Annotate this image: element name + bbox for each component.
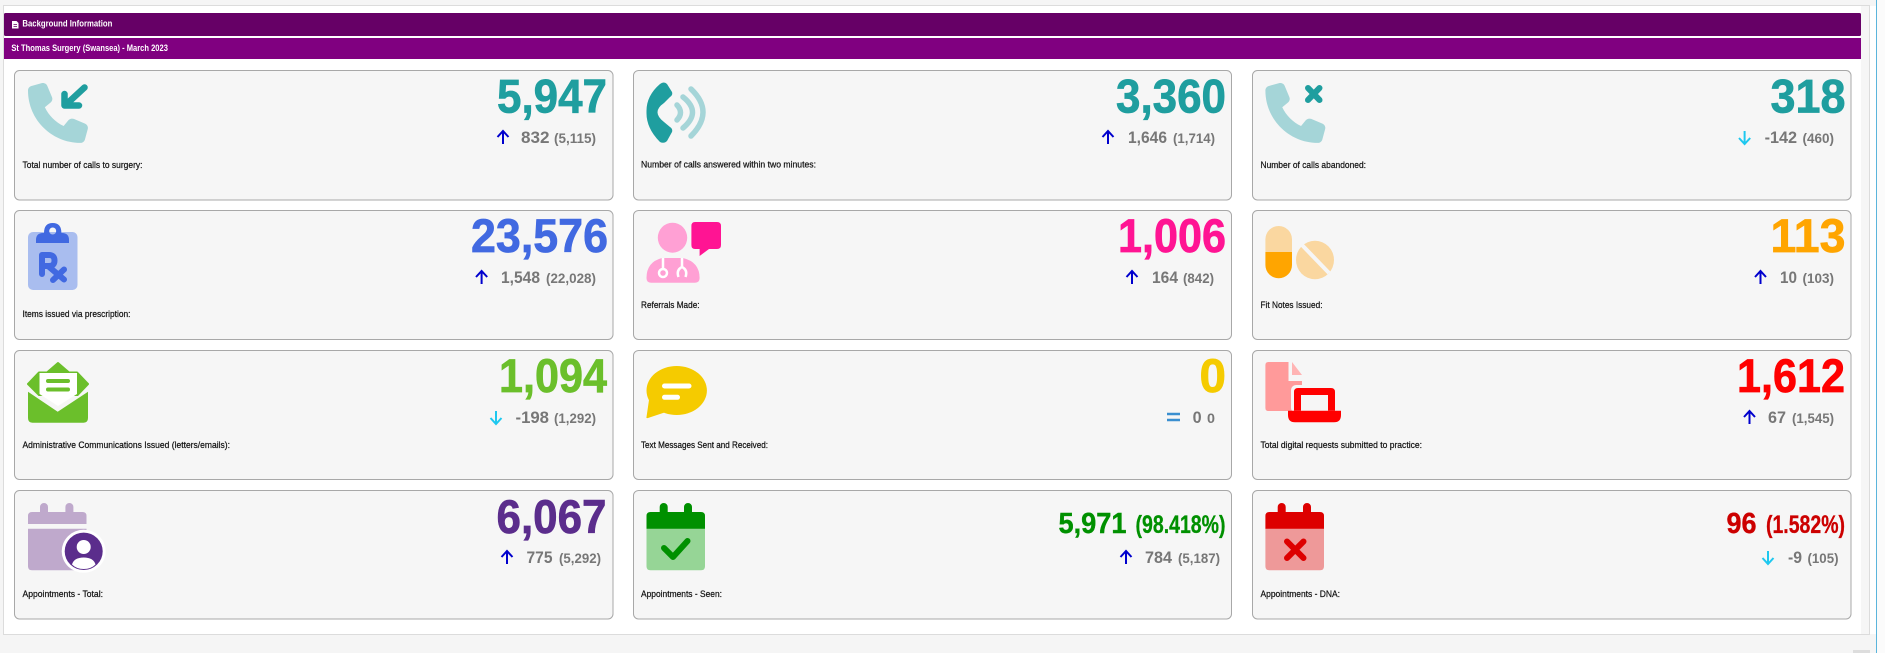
icon: open envelope bbox=[28, 363, 88, 423]
panel: text messages bbox=[634, 349, 1232, 480]
panel: fit notes bbox=[1252, 209, 1851, 340]
change indicator bbox=[498, 128, 596, 147]
label: Appointments - Seen: bbox=[641, 589, 722, 600]
change indicator: (1,292) bbox=[554, 410, 596, 426]
change indicator: (5,187) bbox=[1178, 550, 1220, 566]
panel: calls abandoned bbox=[1252, 70, 1851, 200]
change indicator bbox=[1167, 408, 1215, 427]
value: 113 bbox=[1770, 209, 1846, 262]
value: (1.582%) bbox=[1766, 511, 1845, 539]
value: 3,360 bbox=[1116, 70, 1226, 123]
heading: practice and month: St Thomas Surgery (Swansea) - March 2023 bbox=[11, 43, 168, 54]
label: Items issued via prescription: bbox=[22, 309, 130, 320]
heading: practice and month bbox=[4, 38, 1861, 59]
label: Text Messages Sent and Received: bbox=[641, 440, 768, 451]
icon: document bbox=[12, 21, 18, 28]
value: 5,971 bbox=[1058, 508, 1126, 540]
panel: appointments total bbox=[14, 490, 613, 619]
label: Fit Notes Issued: bbox=[1260, 300, 1322, 311]
value: 96 bbox=[1726, 508, 1756, 540]
change indicator bbox=[502, 548, 601, 567]
change indicator: 10 bbox=[1780, 268, 1797, 287]
heading: background information bbox=[4, 13, 1861, 36]
change indicator: -9 bbox=[1788, 548, 1802, 567]
change indicator bbox=[490, 408, 596, 427]
change indicator bbox=[1762, 548, 1838, 567]
label: Number of calls abandoned: bbox=[1260, 160, 1366, 171]
change indicator: 67 bbox=[1768, 408, 1786, 427]
value: 318 bbox=[1770, 70, 1846, 123]
value: 1,612 bbox=[1737, 349, 1845, 402]
icon: calendar with cross bbox=[1265, 507, 1324, 570]
value: (98.418%) bbox=[1136, 511, 1226, 539]
icon: pills bbox=[1265, 226, 1334, 279]
label: Appointments - DNA: bbox=[1260, 589, 1340, 600]
change indicator bbox=[1739, 128, 1834, 147]
change indicator bbox=[1126, 268, 1214, 287]
label: Total digital requests submitted to practice: bbox=[1260, 440, 1422, 451]
change indicator: (842) bbox=[1183, 270, 1214, 286]
change indicator bbox=[1102, 128, 1215, 147]
panel: prescription items bbox=[14, 209, 613, 340]
panel: calls answered bbox=[634, 70, 1232, 200]
label: Administrative Communications Issued (letters/emails): bbox=[22, 440, 230, 451]
value: 1,006 bbox=[1118, 209, 1226, 262]
value: 5,947 bbox=[497, 70, 607, 123]
change indicator: (105) bbox=[1808, 550, 1838, 566]
icon: calendar with person bbox=[28, 507, 106, 573]
value: 23,576 bbox=[471, 209, 608, 262]
heading: background information: Background Information bbox=[22, 18, 113, 30]
panel: appointments did not attend bbox=[1252, 490, 1851, 619]
change indicator: (22,028) bbox=[546, 270, 596, 286]
panel: digital requests bbox=[1252, 349, 1851, 480]
change indicator: 1,646 bbox=[1128, 128, 1167, 147]
label: Appointments - Total: bbox=[22, 589, 103, 600]
change indicator bbox=[1120, 548, 1220, 567]
change indicator: -198 bbox=[516, 408, 549, 427]
panel: total calls bbox=[14, 70, 613, 200]
value: 1,094 bbox=[499, 349, 607, 402]
icon: speech bubble bbox=[646, 366, 707, 418]
change indicator: 164 bbox=[1152, 268, 1178, 287]
change indicator bbox=[476, 268, 596, 287]
panel: administrative communications bbox=[14, 349, 613, 480]
change indicator: 832 bbox=[521, 128, 550, 147]
change indicator: 784 bbox=[1145, 548, 1173, 567]
panel: referrals bbox=[634, 209, 1232, 340]
icon: missed call bbox=[1265, 83, 1325, 143]
change indicator: -142 bbox=[1765, 128, 1797, 147]
change indicator bbox=[1755, 268, 1834, 287]
change indicator: 0 bbox=[1193, 408, 1202, 427]
change indicator: (103) bbox=[1802, 270, 1834, 286]
icon: calendar with tick bbox=[646, 507, 705, 570]
change indicator: 775 bbox=[526, 548, 552, 567]
icon: phone with sound waves bbox=[646, 82, 703, 143]
icon: doctor with speech bubble bbox=[646, 222, 721, 283]
icon: prescription clipboard bbox=[28, 223, 78, 290]
change indicator: 0 bbox=[1207, 410, 1215, 426]
change indicator: (460) bbox=[1802, 130, 1834, 146]
value bbox=[1058, 508, 1226, 540]
panel: appointments seen bbox=[634, 490, 1232, 619]
change indicator: (1,545) bbox=[1792, 410, 1834, 426]
label: Number of calls answered within two minutes: bbox=[641, 160, 816, 170]
label: Referrals Made: bbox=[641, 300, 700, 311]
value bbox=[1726, 508, 1845, 540]
change indicator: (5,292) bbox=[559, 550, 601, 566]
change indicator: (1,714) bbox=[1173, 130, 1215, 146]
change indicator: 1,548 bbox=[501, 268, 540, 287]
change indicator: (5,115) bbox=[554, 130, 596, 146]
value: 6,067 bbox=[496, 490, 606, 543]
change indicator bbox=[1744, 408, 1834, 427]
value: 0 bbox=[1200, 349, 1226, 402]
icon: document and laptop bbox=[1265, 362, 1341, 422]
icon: incoming call bbox=[28, 83, 88, 143]
label: Total number of calls to surgery: bbox=[22, 160, 142, 171]
